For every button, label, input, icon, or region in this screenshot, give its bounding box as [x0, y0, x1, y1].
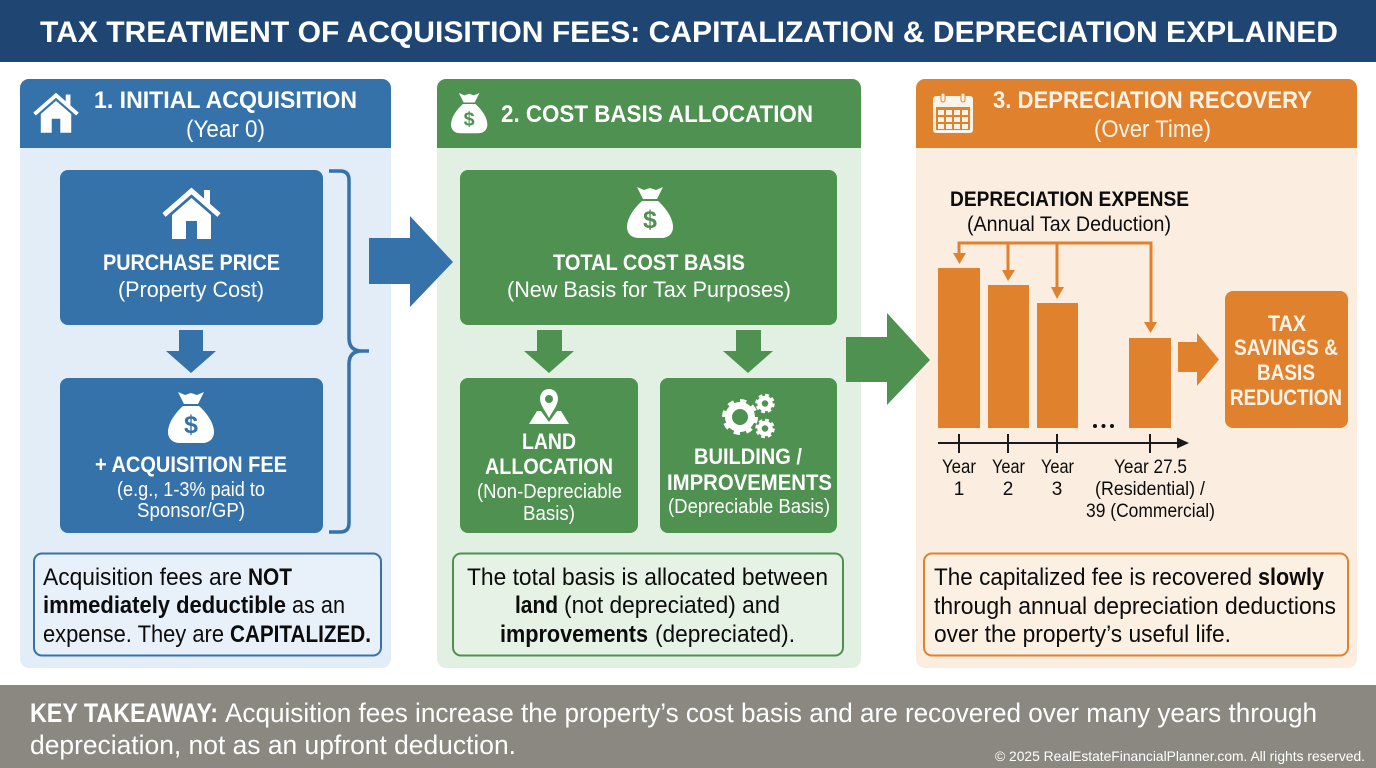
footer: key takeaway	[0, 685, 1376, 768]
box: total cost basis	[460, 170, 837, 325]
box: building improvements	[660, 378, 837, 533]
chart heading	[950, 188, 1189, 236]
box: total cost basis: TOTAL COST BASIS	[553, 250, 745, 275]
box: purchase price: PURCHASE PRICE	[103, 250, 280, 275]
heading: depreciation recovery: 3. DEPRECIATION RECOVERY	[993, 87, 1312, 114]
panel: initial acquisition	[20, 79, 391, 668]
axis labels: 1	[954, 479, 964, 500]
callout: basis allocated	[453, 554, 843, 656]
box: land allocation: ALLOCATION	[485, 454, 613, 479]
box: land allocation: Basis)	[523, 503, 575, 525]
callout: slow recovery	[924, 554, 1348, 656]
box: total cost basis: (New Basis for Tax Purposes)	[507, 277, 791, 302]
heading: depreciation recovery	[993, 87, 1312, 143]
heading: initial acquisition: 1. INITIAL ACQUISITION	[94, 87, 357, 114]
callout: not deductible: NOT	[248, 564, 292, 591]
axis labels: 2	[1003, 479, 1013, 500]
axis labels: Year	[1041, 457, 1075, 478]
box: land allocation: LAND	[522, 429, 576, 454]
axis labels: Year	[942, 457, 977, 478]
icon: header money bag	[451, 93, 487, 133]
box: building improvements: BUILDING /	[694, 444, 802, 469]
title bar: TAX TREATMENT OF ACQUISITION FEES: CAPITALIZATION & DEPRECIATION EXPLAINED	[40, 16, 1338, 49]
callout: basis allocated: The total basis is allocated between	[467, 564, 828, 591]
arrow: step 1 to step 2	[369, 216, 453, 307]
heading: initial acquisition	[94, 87, 357, 143]
icon: header house	[35, 95, 77, 133]
box: tax savings: SAVINGS &	[1234, 335, 1338, 360]
title bar	[0, 0, 1376, 62]
callout: not deductible: expense. They are	[43, 621, 224, 648]
box: acquisition fee: (e.g., 1-3% paid to	[117, 479, 265, 501]
callout: not deductible: CAPITALIZED.	[230, 621, 371, 648]
box: land allocation	[460, 378, 638, 533]
icon: header money bag: $	[464, 108, 475, 130]
callout: slow recovery: The capitalized fee is recovered	[934, 564, 1252, 591]
callout: slow recovery: slowly	[1258, 564, 1325, 591]
footer: key takeaway: Acquisition fees increase the property’s cost basis and are recovered over many years through	[225, 698, 1317, 728]
icon: map pin	[529, 389, 569, 424]
callout: basis allocated: improvements	[500, 621, 648, 648]
callout: slow recovery: over the property’s useful life.	[934, 621, 1231, 648]
icon: money bag: $	[643, 206, 657, 234]
icon: house	[164, 190, 219, 239]
box: land allocation: (Non-Depreciable	[477, 481, 622, 503]
box: tax savings: BASIS	[1257, 360, 1315, 385]
icon: calendar	[933, 93, 973, 133]
bracket	[329, 171, 369, 532]
axis labels: 3	[1052, 479, 1062, 500]
arrow: to land	[524, 330, 574, 373]
heading: initial acquisition: (Year 0)	[186, 116, 265, 143]
callout: not deductible: immediately deductible	[43, 592, 286, 619]
callout: not deductible: as an	[292, 592, 345, 619]
axis labels: 39 (Commercial)	[1086, 501, 1215, 522]
box: building improvements: IMPROVEMENTS	[667, 470, 832, 495]
box: purchase price: (Property Cost)	[118, 277, 264, 302]
arrow: to building	[723, 330, 773, 373]
arrow: to tax savings	[1178, 333, 1219, 386]
chart heading: DEPRECIATION EXPENSE	[950, 188, 1189, 211]
callout: not deductible	[34, 554, 381, 656]
box: tax savings: REDUCTION	[1230, 385, 1342, 410]
axis labels	[942, 457, 1215, 522]
footer: key takeaway: KEY TAKEAWAY:	[30, 698, 218, 728]
box: acquisition fee: + ACQUISITION FEE	[95, 452, 287, 477]
arrow: step 2 to step 3	[846, 313, 930, 405]
callout: slow recovery: through annual depreciation deductions	[934, 593, 1336, 620]
callout: basis allocated: land	[515, 592, 558, 619]
callout: basis allocated: (depreciated).	[655, 621, 795, 648]
heading: depreciation recovery: (Over Time)	[1094, 116, 1211, 143]
ellipsis dots	[1093, 424, 1114, 428]
arrows: expense to bars	[953, 243, 1157, 333]
icon: money bag	[168, 392, 214, 443]
box: tax savings: TAX	[1268, 311, 1306, 336]
icon: gears	[724, 396, 773, 436]
heading: cost basis allocation: 2. COST BASIS ALLOCATION	[501, 101, 813, 128]
box: tax savings	[1225, 291, 1348, 428]
box: acquisition fee: Sponsor/GP)	[137, 500, 245, 522]
axis labels: (Residential) /	[1095, 479, 1206, 500]
panel: depreciation recovery	[916, 79, 1357, 668]
axis labels: Year 27.5	[1114, 457, 1187, 478]
panel: cost basis allocation	[437, 79, 861, 668]
arrow: purchase price to fee	[166, 330, 216, 373]
callout: not deductible: Acquisition fees are	[43, 564, 242, 591]
timeline axis	[938, 434, 1189, 453]
icon: money bag: $	[184, 411, 198, 439]
bar chart	[938, 268, 1171, 428]
chart heading: (Annual Tax Deduction)	[967, 213, 1171, 236]
copyright: © 2025 RealEstateFinancialPlanner.com. All rights reserved.	[995, 748, 1365, 764]
box: purchase price	[60, 170, 323, 325]
box: building improvements: (Depreciable Basis)	[668, 496, 830, 518]
footer: key takeaway: depreciation, not as an upfront deduction.	[30, 730, 516, 760]
axis labels: Year	[992, 457, 1026, 478]
box: acquisition fee	[60, 378, 323, 533]
callout: basis allocated: (not depreciated) and	[564, 592, 780, 619]
icon: money bag	[627, 187, 673, 238]
